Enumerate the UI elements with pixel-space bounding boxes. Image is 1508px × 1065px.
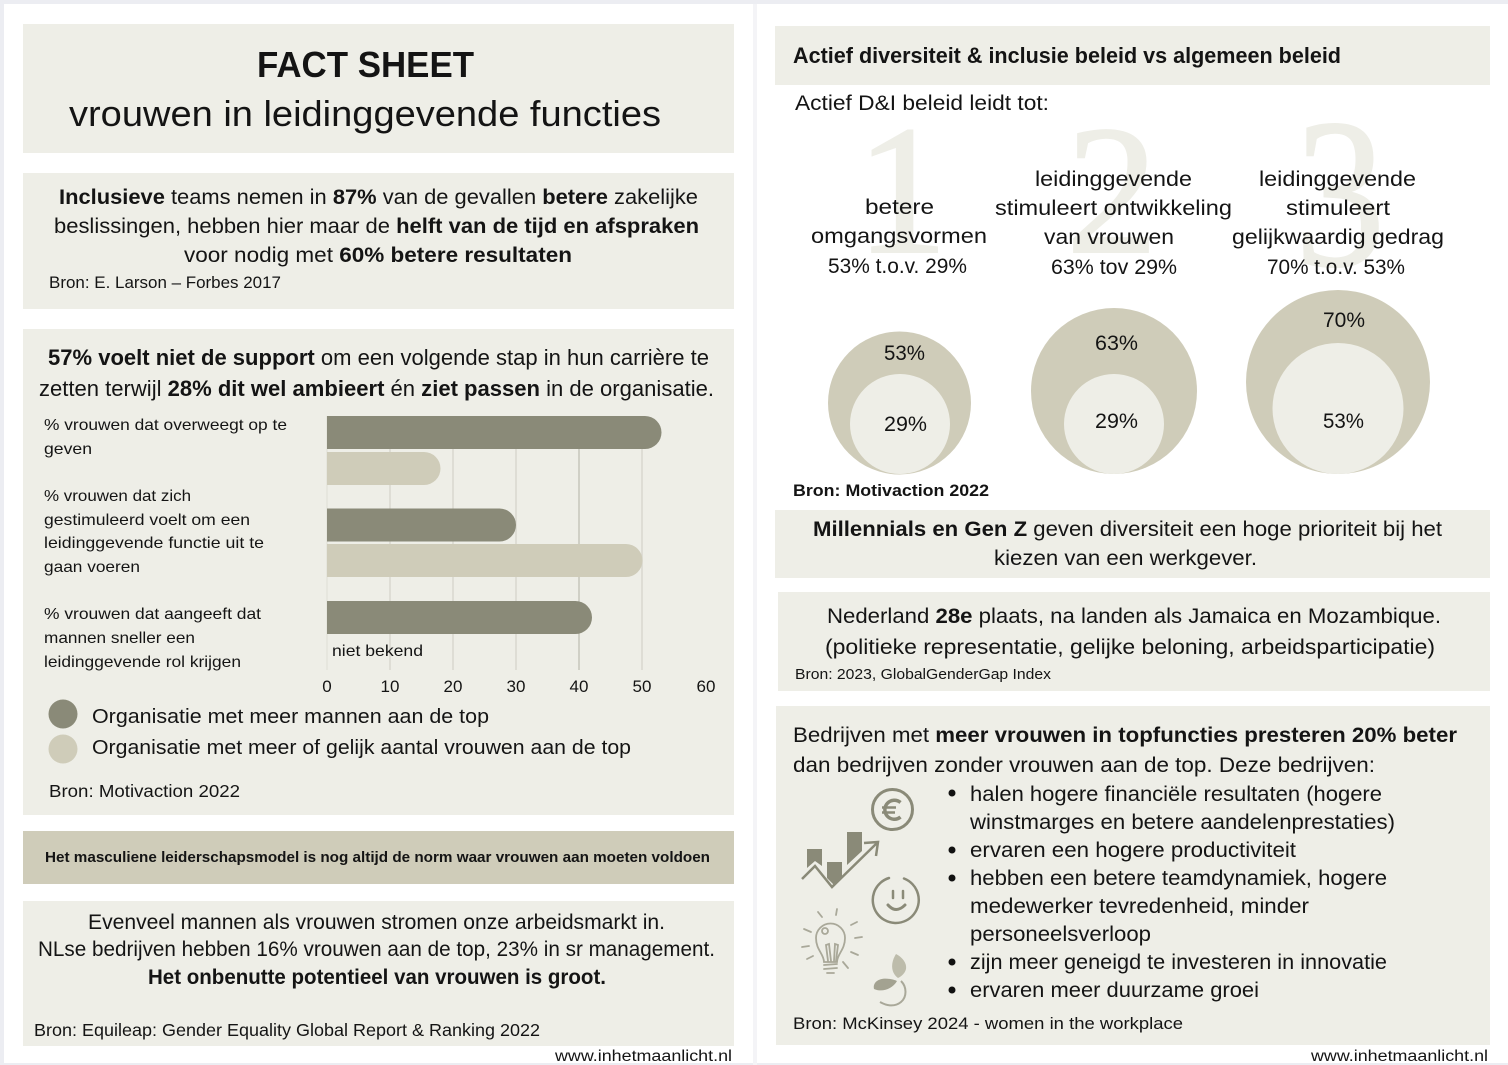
text block: arbeidsmarkt: NLse bedrijven hebben 16% vrouwen aan de top, 23% in sr management. [38, 938, 715, 961]
outcome 2 text: stimuleert ontwikkeling [995, 197, 1232, 220]
circle chart: 70 vs 53: 70% [1323, 309, 1365, 332]
icon: sprout [874, 954, 906, 1005]
source: motivaction: Bron: Motivaction 2022 [49, 781, 240, 801]
bar chart [322, 416, 715, 696]
outcome 1 text: 53% t.o.v. 29% [828, 255, 967, 278]
banner: masculiene leiderschapsmodel: Het masculiene leiderschapsmodel is nog altijd de norm waar vrouwen aan moeten voldoen [45, 850, 710, 866]
bullet list: medewerker tevredenheid, minder [970, 895, 1309, 918]
panel: nederland 28e plaats: Nederland 28e plaats, na landen als Jamaica en Mozambique. [827, 604, 1441, 628]
chart label: gestimuleerd: % vrouwen dat zich [44, 488, 191, 505]
panel: inclusieve teams [23, 173, 734, 309]
heading: presteren 20% beter [793, 723, 1458, 777]
bar chart: 60 [697, 677, 715, 696]
bar chart: 50 [633, 677, 651, 696]
outcome 1 text [811, 196, 987, 278]
subtitle: vrouwen in leidinggevende functies [69, 93, 661, 134]
text block: inclusieve teams: voor nodig met 60% betere resultaten [184, 243, 572, 267]
panel: millennials: kiezen van een werkgever. [994, 546, 1257, 570]
panel: right header [775, 26, 1490, 85]
website link right: www.inhetmaanlicht.nl [1310, 1048, 1488, 1065]
chart label: mannen sneller [44, 606, 262, 671]
legend: Organisatie met meer mannen aan de top [92, 706, 489, 728]
icon: euro coin [872, 790, 912, 830]
heading: 57% support: zetten terwijl 28% dit wel ambieert én ziet passen in de organisatie. [39, 376, 714, 401]
bar chart: 0 [322, 677, 332, 696]
text block: inclusieve teams [54, 185, 699, 267]
banner: masculiene leiderschapsmodel [23, 831, 734, 884]
text block: arbeidsmarkt: Evenveel mannen als vrouwen stromen onze arbeidsmarkt in. [88, 911, 665, 934]
circle chart: 70 vs 53: 53% [1323, 410, 1364, 433]
bullet list [948, 783, 1395, 1002]
bullet list: halen hogere financiële resultaten (hogere [970, 783, 1382, 806]
heading: 57% support: 57% voelt niet de support om een volgende stap in hun carrière te [48, 345, 709, 370]
heading: presteren 20% beter: dan bedrijven zonder vrouwen aan de top. Deze bedrijven: [793, 753, 1375, 777]
circle chart: 63 vs 29: 63% [1095, 332, 1138, 355]
text block: inclusieve teams: beslissingen, hebben hier maar de helft van de tijd en afspraken [54, 214, 699, 238]
icon: smiley [873, 878, 919, 923]
legend: Organisatie met meer of gelijk aantal vrouwen aan de top [92, 737, 631, 759]
chart label: gestimuleerd: leidinggevende functie uit te [44, 535, 264, 552]
text block: arbeidsmarkt: Het onbenutte potentieel van vrouwen is groot. [148, 966, 606, 989]
bullet list: hebben een betere teamdynamiek, hogere [970, 867, 1387, 890]
outcome 3 text: leidinggevende [1259, 168, 1416, 191]
text block: arbeidsmarkt [38, 911, 715, 989]
outcome 1 text: omgangsvormen [811, 225, 987, 248]
chart label: gestimuleerd [44, 488, 264, 576]
website link left: www.inhetmaanlicht.nl [554, 1048, 732, 1065]
outcome 1 text: betere [865, 196, 934, 219]
bar chart: 20 [444, 677, 462, 696]
circle chart: 53 vs 29: 29% [884, 413, 927, 436]
panel: right header: Actief diversiteit & inclusie beleid vs algemeen beleid [793, 43, 1341, 68]
panel: millennials [775, 510, 1490, 578]
chart label: overweegt op te geven: % vrouwen dat overweegt op te [44, 417, 287, 434]
panel: nederland 28e plaats [778, 592, 1490, 691]
circle chart: 63 vs 29 [1031, 308, 1197, 474]
outcome 3 text: gelijkwaardig gedrag [1232, 226, 1444, 249]
outcome 2 text: van vrouwen [1044, 226, 1174, 249]
icon: growth chart [802, 832, 878, 887]
chart label: overweegt op te geven [44, 417, 287, 458]
source: global gender gap: Bron: 2023, GlobalGenderGap Index [795, 666, 1052, 683]
chart label: mannen sneller: mannen sneller een [44, 630, 195, 647]
source: mckinsey: Bron: McKinsey 2024 - women in the workplace [793, 1014, 1183, 1033]
circle chart: 63 vs 29: 29% [1095, 410, 1138, 433]
circle chart: 70 vs 53 [1246, 290, 1430, 474]
panel: bedrijven met meer vrouwen [776, 706, 1490, 1045]
title: fact sheet: FACT SHEET [257, 44, 474, 85]
chart label: mannen sneller: leidinggevende rol krijgen [44, 654, 241, 671]
panel: title [23, 24, 734, 153]
source: equileap: Bron: Equileap: Gender Equality Global Report & Ranking 2022 [34, 1020, 540, 1040]
outcome 3 text: 70% t.o.v. 53% [1267, 256, 1405, 279]
source: motivaction right: Bron: Motivaction 2022 [793, 481, 989, 500]
source: larson: Bron: E. Larson – Forbes 2017 [49, 273, 281, 292]
bullet list: ervaren een hogere productiviteit [970, 839, 1296, 862]
panel: millennials: Millennials en Gen Z geven diversiteit een hoge prioriteit bij het [813, 517, 1442, 541]
outcome 2 text [995, 168, 1232, 279]
panel: support and ambition chart [23, 329, 734, 815]
panel: onbenut potentieel [23, 901, 734, 1046]
bullet list: personeelsverloop [970, 923, 1151, 946]
circle chart: 53 vs 29: 53% [884, 342, 925, 365]
heading: presteren 20% beter: Bedrijven met meer vrouwen in topfuncties presteren 20% beter [793, 723, 1458, 747]
outcome 3 text [1232, 168, 1444, 279]
icon: light bulb [802, 909, 862, 973]
chart label: gestimuleerd: gaan voeren [44, 559, 140, 576]
panel: nederland 28e plaats: (politieke representatie, gelijke beloning, arbeidsparticipatie) [825, 635, 1435, 659]
panel: three outcomes [811, 76, 1444, 474]
bar chart: niet bekend [332, 643, 423, 660]
outcome 3 text: stimuleert [1286, 197, 1390, 220]
outcome 2 text: leidinggevende [1035, 168, 1192, 191]
bullet list: winstmarges en betere aandelenprestaties) [969, 811, 1395, 834]
heading: 57% support [39, 345, 714, 401]
outcome 2 text: 63% tov 29% [1051, 256, 1177, 279]
chart label: mannen sneller: % vrouwen dat aangeeft dat [44, 606, 262, 623]
intro text: actief D&I: Actief D&I beleid leidt tot: [795, 92, 1049, 115]
chart label: overweegt op te geven: geven [44, 441, 92, 458]
bullet list: zijn meer geneigd te investeren in innovatie [970, 951, 1387, 974]
legend [48, 700, 631, 764]
bar chart: 40 [570, 677, 588, 696]
numeral 3: 3 [1295, 76, 1385, 312]
bar chart: 30 [507, 677, 525, 696]
text block: inclusieve teams: Inclusieve teams nemen in 87% van de gevallen betere zakelijke [59, 185, 698, 209]
bullet list: ervaren meer duurzame groei [970, 979, 1259, 1002]
numeral 1: 1 [856, 88, 948, 292]
chart label: gestimuleerd: gestimuleerd voelt om een [44, 512, 250, 529]
bar chart: 10 [381, 677, 399, 696]
circle chart: 53 vs 29 [828, 332, 971, 474]
numeral 2: 2 [1066, 88, 1158, 292]
